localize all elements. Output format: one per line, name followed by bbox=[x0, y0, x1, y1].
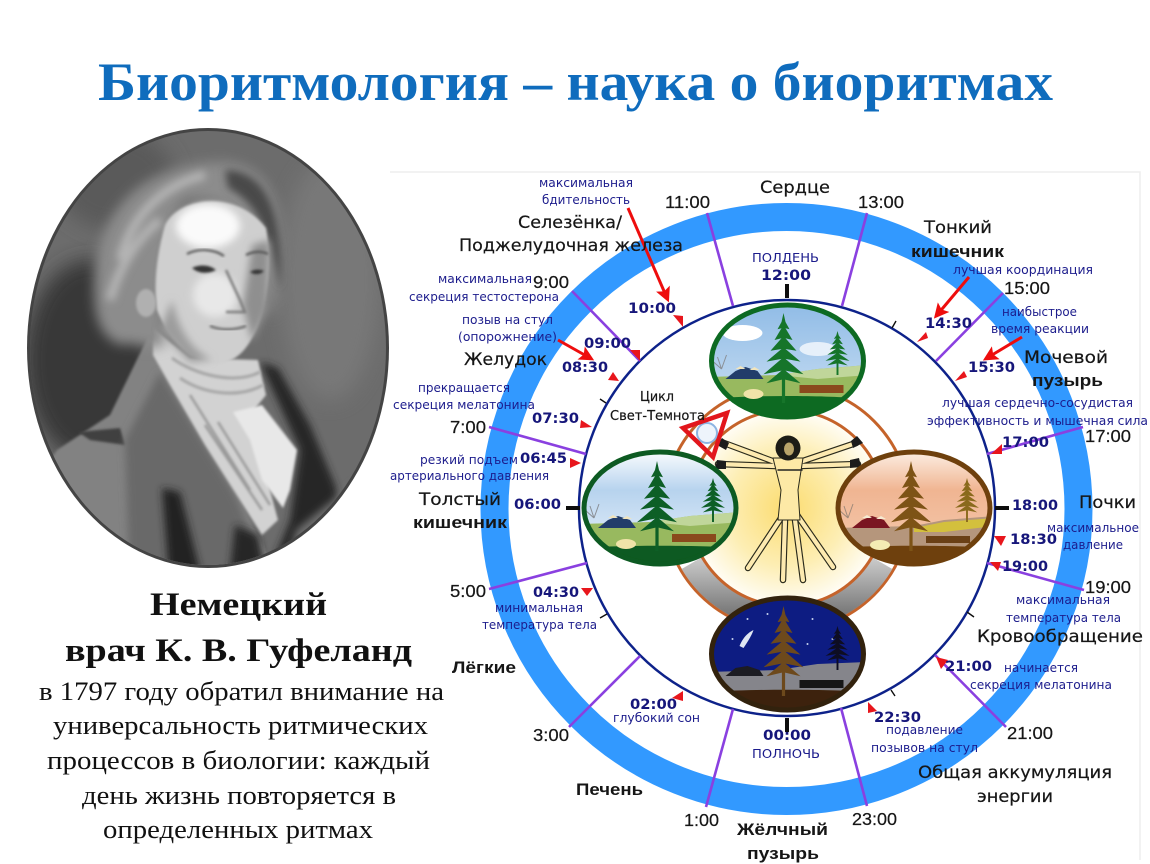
blue annotation texts: температура тела bbox=[482, 618, 597, 632]
blue annotation texts: подавление bbox=[886, 723, 963, 737]
blue annotation texts: максимальная bbox=[1016, 593, 1110, 607]
outer hour labels: 11:00 bbox=[665, 192, 710, 212]
purple hour spokes bbox=[489, 213, 1084, 807]
blue time labels: 07:30 bbox=[532, 411, 579, 427]
blue annotation texts: давление bbox=[1063, 538, 1123, 552]
organ labels bbox=[413, 178, 1143, 863]
coat bbox=[53, 340, 267, 565]
blue time labels: 10:00 bbox=[628, 301, 676, 317]
blue annotation texts: бдительность bbox=[542, 193, 630, 207]
outer hour labels: 15:00 bbox=[1004, 278, 1050, 298]
outer hour labels: 13:00 bbox=[858, 192, 904, 212]
organ labels: Мочевой bbox=[1024, 348, 1108, 367]
blue time labels: 17:00 bbox=[1002, 435, 1049, 451]
organ labels: Желудок bbox=[464, 350, 547, 369]
blue annotation texts: минимальная bbox=[495, 601, 583, 615]
central figure disc with rings bbox=[664, 385, 910, 631]
organ labels: пузырь bbox=[1032, 371, 1103, 390]
blue annotation texts: начинается bbox=[1004, 661, 1078, 675]
blue time labels: 12:00 bbox=[761, 268, 811, 284]
caption: description paragraph: универсальность ритмических bbox=[53, 711, 428, 740]
caption: description paragraph: процессов в биологии: каждый bbox=[47, 746, 430, 775]
portrait of Hufeland bbox=[27, 128, 389, 568]
organ labels: пузырь bbox=[747, 844, 819, 863]
Vitruvian man figure bbox=[715, 436, 863, 580]
outer hour labels: 17:00 bbox=[1085, 426, 1131, 446]
blue time labels bbox=[514, 268, 1058, 744]
caption: doctor name bbox=[65, 587, 412, 669]
cycle label: Свет-Темнота bbox=[610, 409, 705, 424]
blue annotation texts: эффективность и мышечная сила bbox=[927, 414, 1148, 428]
title: Биоритмология – наука о биоритмах bbox=[98, 52, 1053, 112]
organ labels: кишечник bbox=[413, 513, 508, 532]
scene: evening oval bbox=[834, 448, 994, 568]
organ labels: Кровообращение bbox=[977, 627, 1143, 646]
face bbox=[156, 201, 269, 364]
blue time labels: 19:00 bbox=[1002, 559, 1048, 575]
blue time labels: 18:30 bbox=[1010, 532, 1057, 548]
organ labels: энергии bbox=[977, 787, 1053, 806]
scene: noon oval bbox=[708, 301, 868, 421]
blue time labels: 02:00 bbox=[630, 697, 677, 713]
scene: morning oval bbox=[580, 448, 740, 568]
blue annotation texts: секреция тестостерона bbox=[409, 290, 559, 304]
blue annotation texts: артериального давления bbox=[390, 469, 549, 483]
blue time labels: 08:30 bbox=[562, 360, 608, 376]
cycle label: Цикл bbox=[640, 390, 674, 405]
blue annotation texts: позыв на стул bbox=[462, 313, 553, 327]
organ labels: Жёлчный bbox=[736, 820, 828, 839]
organ labels: Общая аккумуляция bbox=[918, 763, 1112, 782]
caption: description paragraph: определенных ритмах bbox=[103, 815, 373, 844]
caption: doctor name: Немецкий bbox=[150, 587, 327, 623]
circular biorhythm diagram bbox=[390, 172, 1148, 863]
outer hour labels: 19:00 bbox=[1085, 577, 1131, 597]
blue time labels: 14:30 bbox=[925, 316, 972, 332]
hair bbox=[94, 162, 280, 347]
outer hour labels: 23:00 bbox=[852, 809, 897, 829]
blue annotation texts: (опорожнение) bbox=[458, 330, 557, 344]
organ labels: Поджелудочная железа bbox=[459, 236, 683, 255]
outer blue ring bbox=[494, 217, 1078, 801]
cravat and shirt bbox=[153, 328, 278, 535]
blue time labels: 00:00 bbox=[763, 728, 811, 744]
caption: doctor name: врач К. В. Гуфеланд bbox=[65, 633, 412, 669]
blue annotation texts: глубокий сон bbox=[613, 711, 700, 725]
blue time labels: 09:00 bbox=[584, 336, 631, 352]
organ labels: Толстый bbox=[418, 490, 501, 509]
scene: night oval bbox=[708, 594, 868, 714]
blue annotation texts: резкий подъем bbox=[420, 453, 518, 467]
blue time labels: 04:30 bbox=[533, 585, 579, 601]
blue annotation texts: максимальная bbox=[539, 176, 633, 190]
outer hour labels: 7:00 bbox=[450, 417, 486, 437]
blue annotation texts: ПОЛДЕНЬ bbox=[752, 251, 819, 265]
black tick marks bbox=[566, 284, 1009, 732]
blue annotation texts: позывов на стул bbox=[871, 741, 978, 755]
cycle label bbox=[610, 390, 705, 424]
outer hour labels: 3:00 bbox=[533, 725, 569, 745]
outer hour labels: 9:00 bbox=[533, 272, 569, 292]
caption: description paragraph bbox=[39, 677, 444, 844]
blue annotation texts: лучшая координация bbox=[953, 263, 1093, 277]
organ labels: Лёгкие bbox=[452, 658, 516, 677]
blue annotation texts: секреция мелатонина bbox=[970, 678, 1112, 692]
caption: description paragraph: день жизнь повторяется в bbox=[82, 781, 396, 810]
organ labels: Печень bbox=[576, 780, 643, 799]
blue time labels: 06:45 bbox=[520, 451, 567, 467]
blue annotation texts: лучшая сердечно-сосудистая bbox=[942, 396, 1133, 410]
blue annotation texts: время реакции bbox=[991, 322, 1089, 336]
outer hour labels: 21:00 bbox=[1007, 723, 1053, 743]
blue annotation texts: наибыстрое bbox=[1002, 305, 1077, 319]
organ labels: Сердце bbox=[760, 178, 830, 197]
blue annotation texts: максимальная bbox=[438, 272, 532, 286]
organ labels: Тонкий bbox=[923, 218, 992, 237]
organ labels: Селезёнка/ bbox=[518, 213, 622, 232]
red arrows bbox=[558, 208, 1022, 358]
blue annotation texts bbox=[390, 176, 1148, 761]
blue annotation texts: максимальное bbox=[1047, 521, 1139, 535]
blue time labels: 06:00 bbox=[514, 497, 561, 513]
blue time labels: 21:00 bbox=[945, 659, 992, 675]
outer hour labels: 1:00 bbox=[684, 810, 719, 830]
organ labels: Почки bbox=[1079, 493, 1136, 512]
inner dark blue circle bbox=[579, 300, 995, 716]
organ labels: кишечник bbox=[911, 242, 1005, 261]
blue annotation texts: секреция мелатонина bbox=[393, 398, 535, 412]
blue time labels: 22:30 bbox=[874, 710, 921, 726]
outer hour labels: 5:00 bbox=[450, 581, 486, 601]
blue annotation texts: температура тела bbox=[1006, 611, 1121, 625]
caption: description paragraph: в 1797 году обратил внимание на bbox=[39, 677, 444, 706]
icon: red triangle with clock bbox=[683, 413, 727, 457]
outer hour labels bbox=[450, 192, 1131, 830]
blue annotation texts: ПОЛНОЧЬ bbox=[752, 747, 820, 761]
blue time labels: 15:30 bbox=[968, 360, 1015, 376]
red time triangles bbox=[570, 315, 1006, 713]
blue time labels: 18:00 bbox=[1012, 498, 1058, 514]
blue annotation texts: прекращается bbox=[418, 381, 510, 395]
